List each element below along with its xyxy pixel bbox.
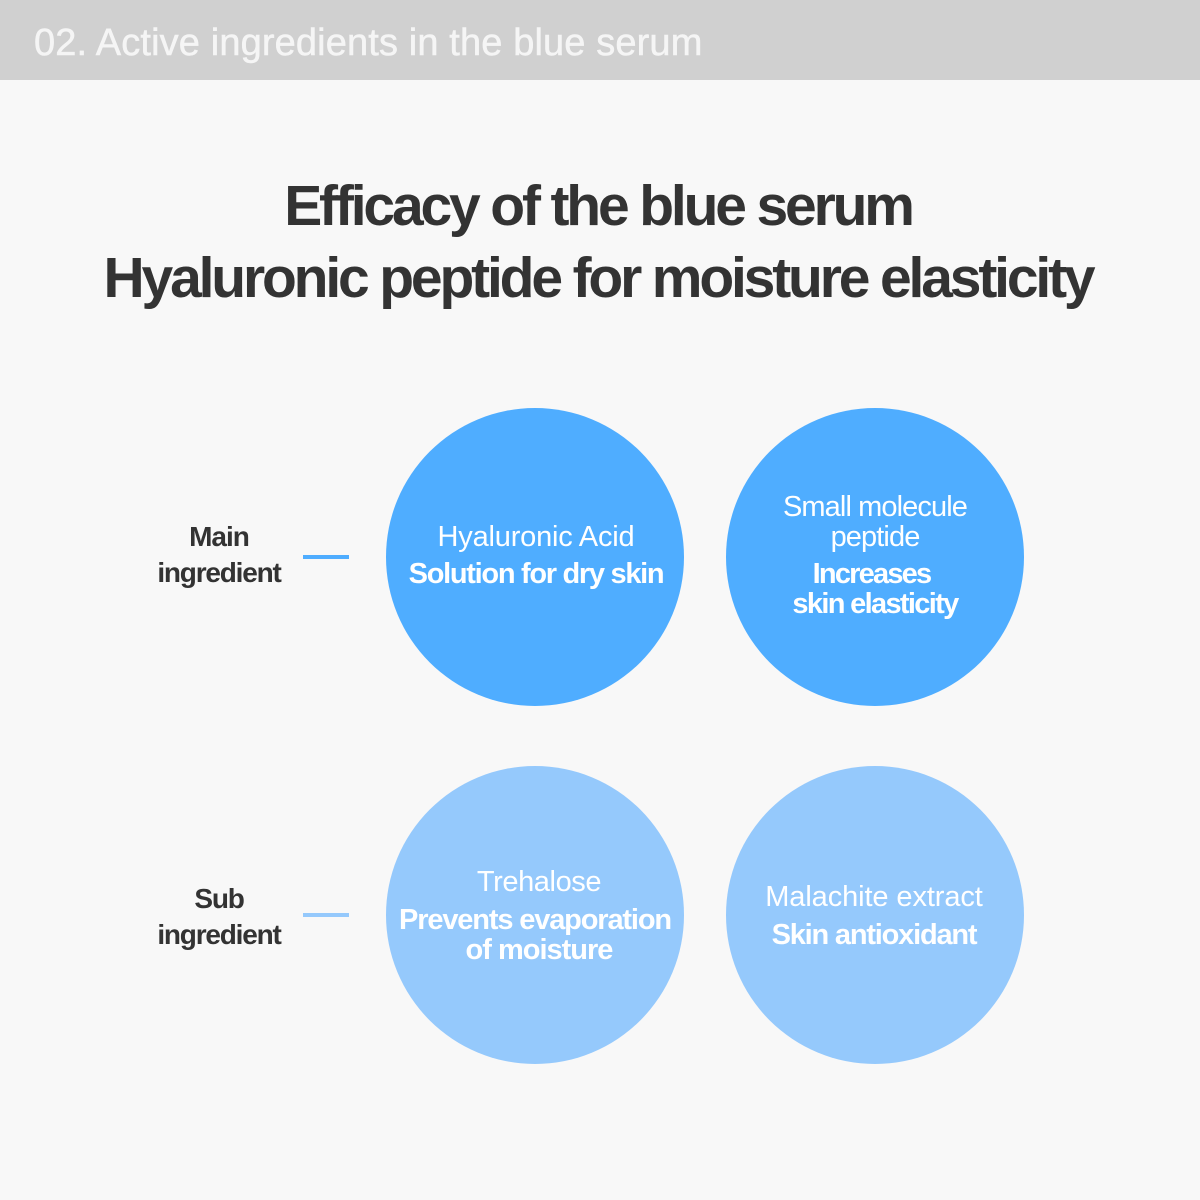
label: main ingredient	[157, 521, 282, 588]
circle text: trehalose	[399, 866, 671, 966]
label: sub ingredient: ingredient	[157, 919, 281, 950]
circle text: small molecule peptide	[783, 491, 967, 620]
circle text: malachite extract: Skin antioxidant	[772, 919, 976, 951]
label: sub ingredient: Sub	[194, 883, 244, 914]
circle text: trehalose: Trehalose	[477, 866, 601, 898]
label: main ingredient: Main	[189, 521, 249, 552]
circle text: hyaluronic acid	[409, 521, 663, 590]
circle: malachite extract	[726, 766, 1024, 1064]
circle text: malachite extract	[765, 881, 983, 951]
label: sub ingredient	[157, 883, 282, 950]
title: Efficacy of the blue serum	[284, 174, 912, 238]
circle text: small molecule peptide: peptide	[831, 521, 919, 553]
connector: main ingredient	[303, 555, 349, 559]
title: Hyaluronic peptide for moisture elasticity	[104, 246, 1092, 310]
circle text: trehalose: of moisture	[466, 934, 612, 966]
label: main ingredient: ingredient	[157, 557, 281, 588]
circle text: hyaluronic acid: Hyaluronic Acid	[438, 521, 634, 553]
title	[104, 174, 1096, 310]
circle: small molecule peptide	[726, 408, 1024, 706]
circle text: small molecule peptide: Small molecule	[783, 491, 967, 523]
header bar	[0, 0, 1200, 80]
connector: sub ingredient	[303, 913, 349, 917]
circle text: trehalose: Prevents evaporation	[399, 904, 671, 936]
circle: trehalose	[386, 766, 684, 1064]
circle text: small molecule peptide: skin elasticity	[792, 588, 958, 620]
circle text: small molecule peptide: Increases	[813, 558, 930, 590]
header text: 02. Active ingredients in the blue serum	[34, 22, 702, 64]
circle: hyaluronic acid	[386, 408, 684, 706]
circle text: hyaluronic acid: Solution for dry skin	[409, 558, 663, 590]
circle text: malachite extract: Malachite extract	[765, 881, 983, 913]
